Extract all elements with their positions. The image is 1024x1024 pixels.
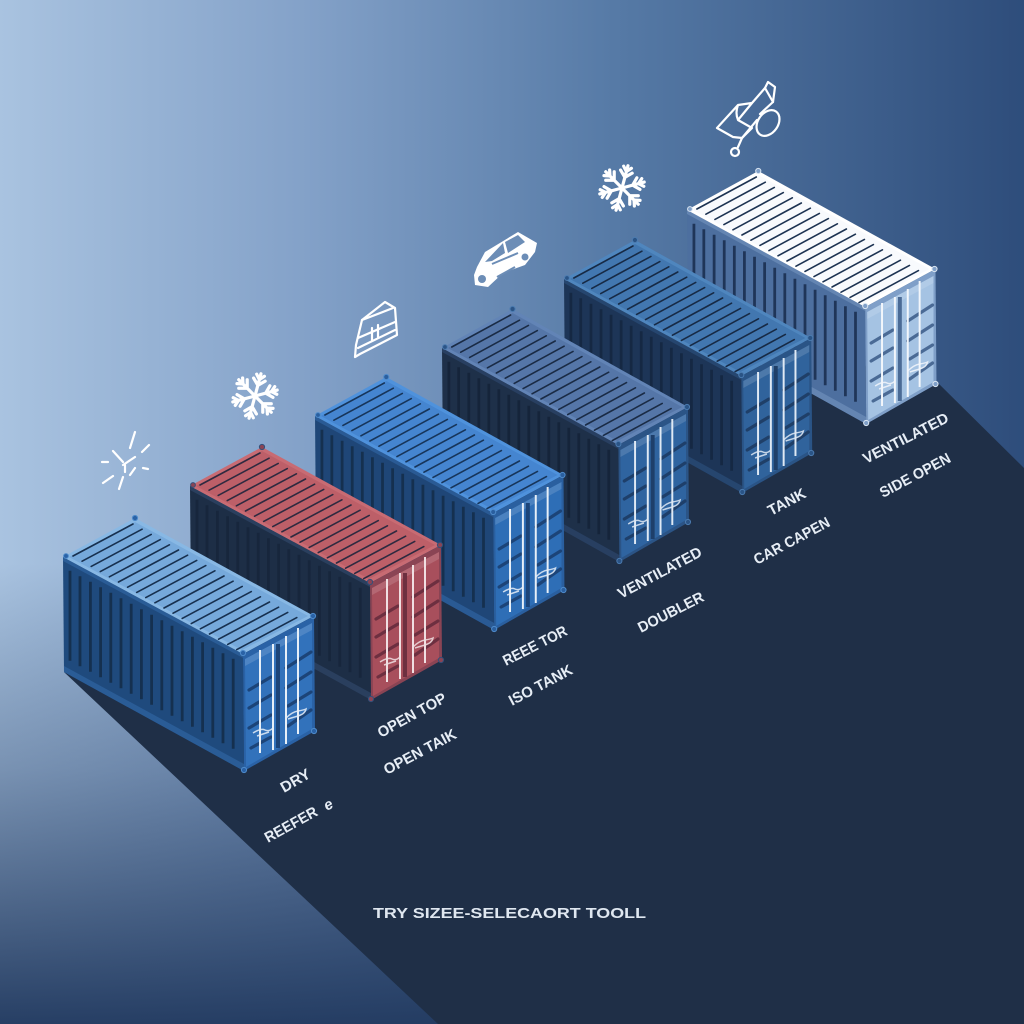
label: DOUBLER: DOUBLER [635, 589, 707, 637]
container 1: dry blue [63, 515, 317, 773]
label: OPEN TOP: OPEN TOP [375, 690, 449, 741]
label: CAR CAPEN: CAR CAPEN [751, 514, 833, 569]
container 4: slate blue [442, 306, 691, 564]
label: SIDE OPEN: SIDE OPEN [877, 450, 954, 502]
label: REEE TOR: REEE TOR [500, 623, 570, 670]
label: VENTILATED: VENTILATED [615, 544, 705, 603]
icon: snowflake 1 [227, 368, 283, 424]
container 2: red [190, 444, 444, 702]
label: REEFER: e [321, 796, 336, 814]
icon: train [355, 302, 397, 357]
icon: lawn mower [717, 82, 784, 156]
call to action text: TRY SIZEE-SELECAORT TOOLL [373, 905, 646, 922]
container 5: steel blue [564, 237, 814, 495]
icon: snowflake 2 [594, 160, 650, 216]
label: ISO TANK: ISO TANK [506, 662, 576, 710]
long cast shadow [64, 325, 1024, 1024]
container 3: bright blue [315, 374, 566, 632]
icon: sparkle [102, 432, 149, 489]
label: VENTILATED: VENTILATED [860, 410, 952, 468]
container 6: white ventilated [687, 168, 938, 426]
label: OPEN TAIK: OPEN TAIK [381, 726, 460, 779]
label: TANK: TANK [765, 485, 809, 520]
icon: car [474, 232, 537, 287]
label: DRY: DRY [278, 766, 314, 796]
label: REEFER: REEFER [262, 803, 321, 846]
